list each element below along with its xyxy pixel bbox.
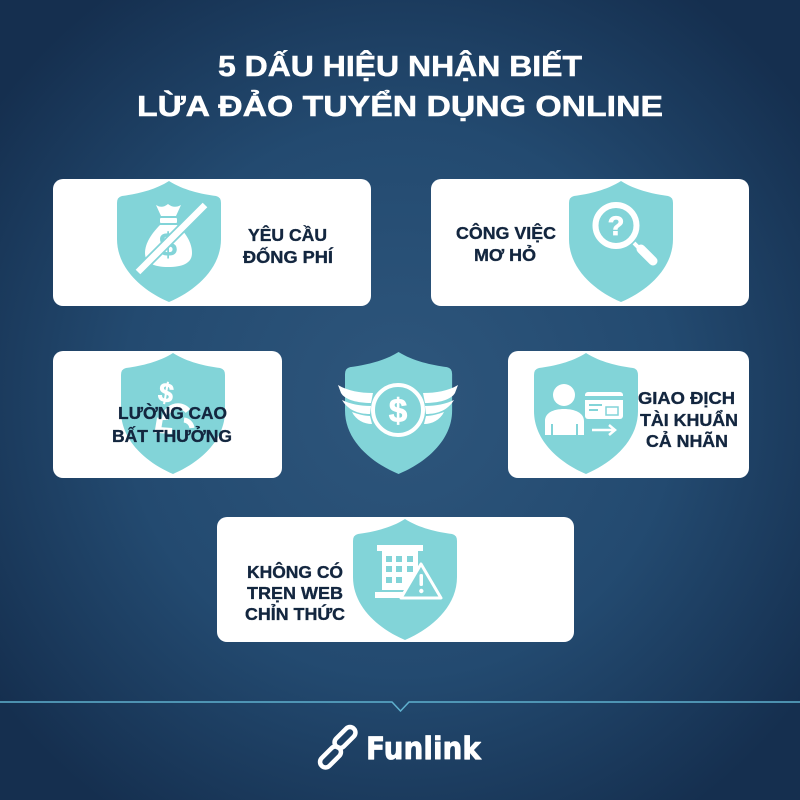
panel: không có trên web chính thức	[217, 517, 574, 642]
icon: central winged dollar shield: $	[389, 392, 407, 429]
icon: chain link	[318, 725, 358, 770]
footer divider with notch	[0, 702, 800, 711]
icon: shield with dollar and coins	[121, 353, 225, 474]
panel: lương cao bất thường	[53, 351, 282, 478]
title	[137, 49, 663, 123]
label	[243, 224, 334, 267]
label: MƠ HỎ	[474, 244, 536, 265]
icon: shield with crossed money bag	[117, 181, 221, 302]
title: 5 DẤU HIỆU NHẬN BIẾT	[218, 49, 582, 83]
label: LƯỜNG CAO	[118, 402, 227, 423]
label: BẤT THƯỞNG	[112, 425, 232, 446]
label: ĐỐNG PHÍ	[243, 246, 334, 267]
panel: yêu cầu đóng phí	[53, 179, 371, 306]
logo: Funlink	[318, 725, 482, 770]
label: YÊU CẦU	[248, 224, 327, 245]
icon: shield with magnifier	[569, 181, 673, 302]
label	[245, 561, 345, 624]
panel: giao dịch tài khoản cá nhân	[508, 351, 749, 478]
label	[456, 222, 556, 265]
icon: shield with person and card	[534, 353, 638, 474]
label: TÀI KHUẨN	[640, 409, 738, 430]
title: LỪA ĐẢO TUYỂN DỤNG ONLINE	[137, 89, 663, 123]
label	[638, 388, 738, 451]
panel: công việc mơ hồ	[431, 179, 749, 306]
icon: shield with crossed money bag: $	[159, 226, 177, 263]
label	[112, 402, 232, 446]
label: TRẸN WEB	[247, 583, 343, 603]
icon: shield with dollar and coins: $	[156, 377, 176, 409]
label: CHỈN THỨC	[245, 603, 345, 624]
icon: shield with magnifier: ?	[608, 211, 624, 241]
label: CẢ NHÃN	[646, 430, 728, 451]
label: CÔNG VIỆC	[456, 222, 556, 243]
logo: Funlink: Funlink	[366, 731, 482, 767]
icon: central winged dollar shield	[338, 352, 458, 474]
label: KHÔNG CÓ	[247, 561, 343, 582]
label: GIAO ĐỊCH	[638, 388, 735, 408]
icon: shield with building and warning	[353, 519, 457, 640]
